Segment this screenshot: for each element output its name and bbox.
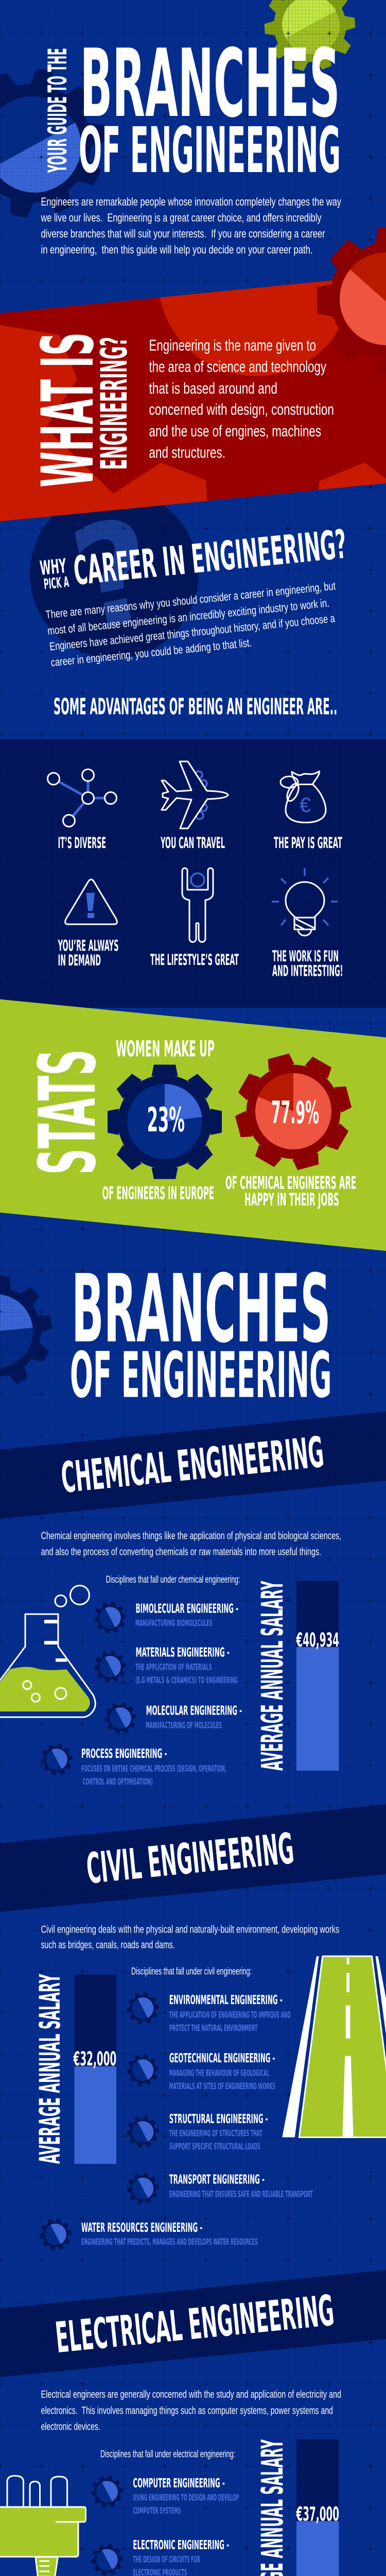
icon: plug — [0, 2476, 85, 2576]
gear: large dark red — [0, 280, 386, 501]
icon: question mark circle — [30, 487, 199, 665]
item: computer: COMPUTER SYSTEMS — [133, 2506, 181, 2516]
icon: road — [282, 1956, 386, 2137]
item: molecular: MANUFACTURING OF MOLECULES — [146, 1720, 222, 1731]
gear: 77.9 percent: 77.9% — [271, 1095, 319, 1131]
item: materials: MATERIALS ENGINEERING - — [136, 1645, 230, 1660]
text: civil intro: such as bridges, canals, roads and dams. — [41, 1940, 175, 1951]
text: disciplines: Disciplines that fall under civil engineering: — [131, 1966, 252, 1977]
item: electronic — [88, 2537, 229, 2576]
label: you're always in demand — [58, 937, 118, 969]
heading: branches of engineering — [70, 1254, 331, 1412]
item: water resources — [37, 2215, 258, 2253]
text: disciplines: Disciplines that fall under chemical engineering: — [106, 1574, 240, 1585]
item: materials: THE APPLICATION OF MATERIALS — [135, 1663, 212, 1673]
text: definition: and structures. — [149, 443, 225, 462]
item: process — [38, 1740, 226, 1787]
section: chemical engineering: AVERAGE ANNUAL SALARY — [255, 1581, 290, 1771]
section: civil engineering: €32,000 — [73, 2048, 116, 2070]
section: electrical engineering — [0, 2286, 341, 2576]
panel: why pick a career — [39, 522, 348, 669]
salary: electrical — [255, 2439, 339, 2576]
title — [43, 29, 341, 187]
item: structural — [124, 2111, 268, 2152]
panel: stats: WOMEN MAKE UP — [116, 1037, 215, 1062]
text: THE LIFESTYLE’S GREAT — [150, 951, 239, 969]
salary: civil — [33, 1974, 116, 2164]
section: civil engineering: MANAGING THE BEHAVIOUR OF GEOLOGICAL — [169, 2069, 269, 2079]
item: materials — [91, 1645, 238, 1686]
item: molecular — [101, 1699, 242, 1737]
section: electrical engineering: €37,000 — [296, 2503, 339, 2526]
icon: person — [182, 868, 213, 942]
panel: dark advantages background — [0, 739, 386, 1008]
panel: what is engineering: ENGINEERING? — [93, 337, 135, 470]
text: IT’S DIVERSE — [58, 834, 106, 852]
label: you're always in demand: IN DEMAND — [58, 952, 101, 969]
section: electrical engineering: USING ENGINEERING TO DESIGN AND DEVELOP — [133, 2493, 239, 2503]
text: electrical intro: electronic devices. — [41, 2421, 100, 2433]
item: transport: TRANSPORT ENGINEERING - — [169, 2172, 265, 2187]
text: chemical intro — [41, 1530, 341, 1558]
icon: money bag — [280, 771, 326, 822]
icon: light bulb — [272, 868, 338, 936]
heading: why: WHY — [39, 554, 67, 580]
gear: small red — [317, 227, 386, 375]
text: definition: Engineering is the name given to — [149, 336, 316, 354]
text: electrical intro — [41, 2389, 341, 2433]
item: biomolecular: MANUFACTURING BIOMOLECULES — [135, 1618, 212, 1629]
panel: stats: OF ENGINEERS IN EUROPE — [102, 1183, 214, 1204]
item: process: PROCESS ENGINEERING - — [81, 1746, 167, 1761]
text: definition: and the use of engines, machines — [149, 422, 321, 440]
item: water resources: WATER RESOURCES ENGINEERING - — [81, 2220, 202, 2235]
gear: navy title gear — [0, 57, 118, 229]
panel: what is engineering: WHAT IS — [26, 332, 110, 487]
band: chemical — [0, 1412, 386, 1519]
panel: what is engineering — [0, 227, 386, 521]
text: definition — [149, 336, 334, 462]
section: civil engineering: GEOTECHNICAL ENGINEERING - — [169, 2050, 275, 2065]
gear: navy branches gear — [0, 1268, 59, 1395]
salary: chemical — [255, 1581, 339, 1771]
text: civil intro — [41, 1924, 339, 1951]
icon: flask — [0, 1586, 95, 1717]
section: civil engineering: STRUCTURAL ENGINEERING - — [169, 2111, 268, 2126]
intro text — [41, 195, 341, 256]
item: structural: SUPPORT SPECIFIC STRUCTURAL LOADS — [169, 2142, 260, 2152]
icon: plane — [162, 761, 228, 828]
text: YOU’RE ALWAYS — [58, 937, 118, 954]
text: definition: that is based around and — [149, 379, 277, 397]
text: YOU CAN TRAVEL — [161, 834, 225, 852]
item: computer: COMPUTER ENGINEERING - — [133, 2476, 225, 2490]
label: the work is fun — [272, 947, 343, 980]
icon: money bag: € — [300, 794, 311, 817]
section: civil engineering — [33, 1824, 386, 2253]
item: transport — [124, 2170, 313, 2207]
icon: warning triangle — [65, 879, 117, 924]
gear: green title gear — [255, 0, 365, 81]
icon: question mark circle: ? — [59, 487, 169, 665]
icon: network — [47, 769, 116, 826]
panel: stats: STATS — [22, 1049, 113, 1175]
section: chemical engineering: MOLECULAR ENGINEERING - — [146, 1703, 242, 1718]
band: electrical — [0, 2270, 386, 2377]
text: reasons — [45, 579, 336, 669]
text: reasons: career in engineering, you could be adding to that list. — [50, 636, 252, 669]
item: biomolecular — [91, 1599, 238, 1637]
item: electronic: THE DESIGN OF CIRCUITS FOR — [133, 2555, 200, 2565]
panel: why pick a career: PICK A — [43, 573, 70, 592]
section: chemical engineering — [0, 1428, 341, 1787]
section: civil engineering: THE ENGINEERING OF STRUCTURES THAT — [169, 2129, 262, 2139]
item: environmental: PROTECT THE NATURAL ENVIRONMENT — [169, 2023, 258, 2033]
text: disciplines: Disciplines that fall under electrical engineering: — [100, 2449, 235, 2460]
section: chemical engineering: BIMOLECULAR ENGINEERING - — [136, 1601, 238, 1616]
section: chemical engineering: (E.G METALS & CERAMICS) TO ENGINEERING — [135, 1675, 238, 1686]
gear: 77.9 percent — [223, 1041, 364, 1182]
section: civil engineering: AVERAGE ANNUAL SALARY — [33, 1974, 66, 2164]
item: environmental — [124, 1989, 291, 2033]
section: chemical engineering: €40,934 — [296, 1629, 339, 1651]
section: chemical engineering: FOCUSES ON ENTIRE CHEMICAL PROCESS (DESIGN, OPERATION, — [81, 1764, 226, 1774]
band: civil — [0, 1804, 386, 1912]
section: electrical engineering: ELECTRONIC ENGINEERING - — [133, 2537, 229, 2552]
item: process: CONTROL AND OPTIMISATION) — [83, 1777, 153, 1787]
item: geotechnical — [124, 2050, 275, 2092]
gear: 23 percent — [108, 1064, 222, 1179]
gear: 23 percent: 23% — [147, 1101, 185, 1140]
panel: stats — [0, 999, 386, 1251]
item: computer — [88, 2473, 239, 2516]
label: of chemical engineers — [225, 1173, 356, 1210]
